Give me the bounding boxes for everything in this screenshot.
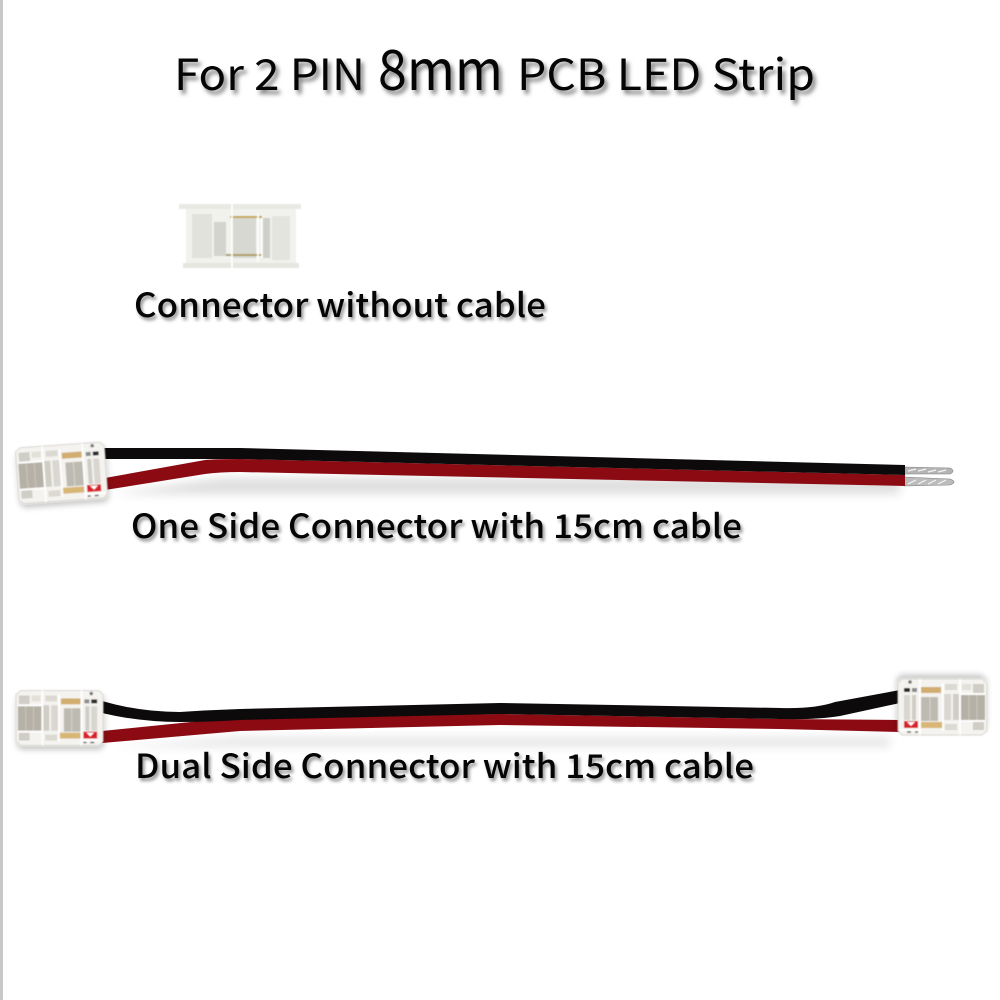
cable shadow <box>110 478 900 494</box>
left connector <box>16 691 103 745</box>
left page edge strip <box>0 0 3 1000</box>
label: one side connector: One Side Connector with 15cm cable <box>131 500 742 548</box>
title: PCB LED Strip <box>517 41 815 103</box>
dual side connector cable <box>16 679 987 747</box>
red wire <box>102 714 900 743</box>
title: 8mm <box>378 26 503 107</box>
title <box>174 26 815 107</box>
black wire <box>104 448 905 475</box>
connector <box>15 442 108 504</box>
title: For 2 PIN <box>174 41 365 103</box>
right connector <box>898 679 987 735</box>
label: connector without cable: Connector without cable <box>134 279 546 327</box>
icon: connector without cable <box>179 204 301 268</box>
one side connector cable <box>15 442 954 504</box>
black wire <box>102 690 900 722</box>
cable shadow <box>110 737 890 747</box>
red wire <box>105 459 905 490</box>
bare wire tips <box>904 467 954 486</box>
label: dual side connector: Dual Side Connector with 15cm cable <box>135 740 754 788</box>
